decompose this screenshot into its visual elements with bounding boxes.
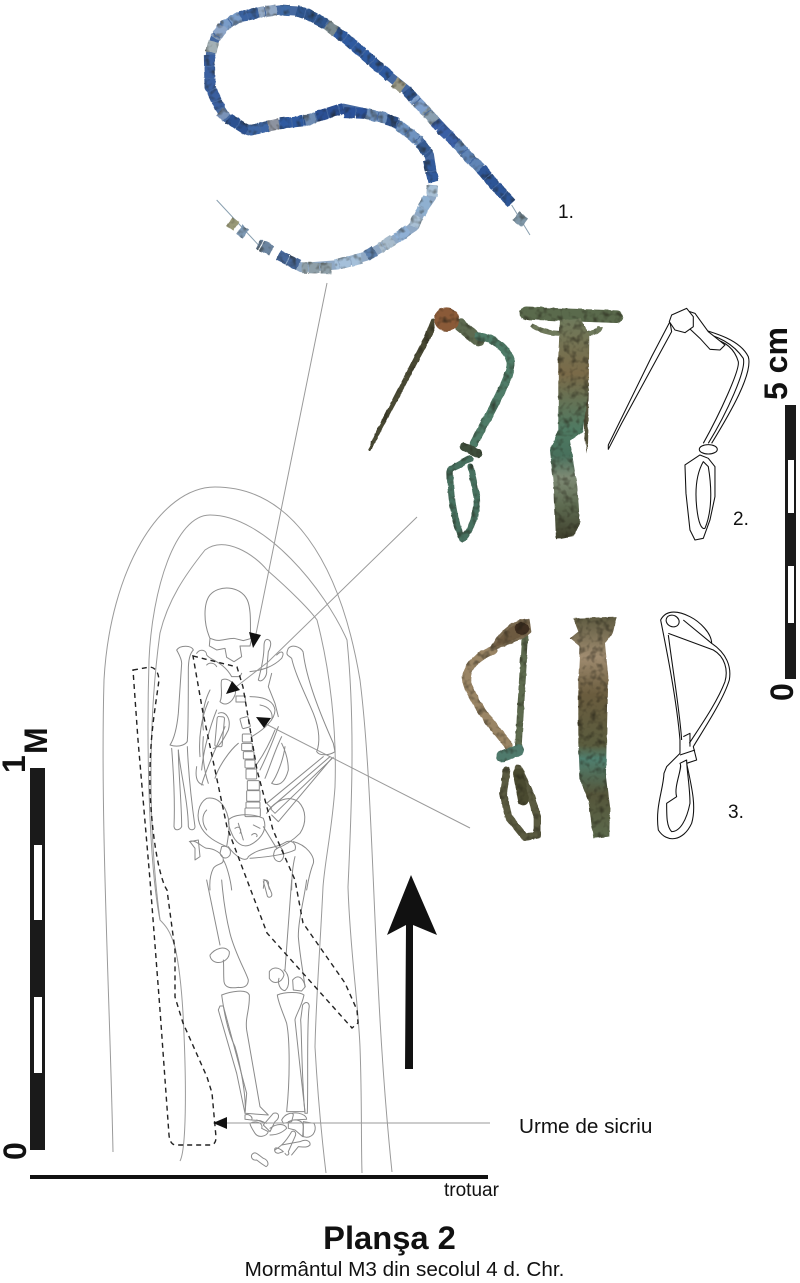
skeleton: upper body (170, 588, 335, 890)
shoulder girdle (197, 639, 283, 717)
arrowhead: to beads (249, 632, 261, 648)
front view photo (570, 617, 617, 838)
title: Planşa 2 (323, 1219, 456, 1256)
item number 1: 1. (558, 202, 574, 223)
arms (170, 646, 335, 830)
skull (205, 588, 251, 638)
ribs (196, 690, 288, 785)
label: coffin traces: Urme de sicriu (519, 1115, 652, 1138)
side view photo (369, 307, 511, 539)
scale bar: 5 cm: 5 cm (758, 327, 794, 400)
femur heads (189, 841, 314, 890)
fibula 2 line drawing (608, 308, 749, 540)
north arrow (387, 875, 437, 1069)
stray bone near left femur (263, 880, 272, 897)
fibula 3 line drawing (658, 612, 730, 839)
scale bar: 5 cm (758, 327, 800, 701)
jaw and teeth (209, 638, 252, 662)
fibula 3 photographs (466, 617, 617, 838)
ground line (30, 1175, 488, 1179)
leader lines with arrowheads (213, 283, 490, 1129)
arrowhead: coffin traces (213, 1117, 227, 1129)
item number 3: 3. (728, 802, 744, 823)
dashed coffin traces (133, 656, 358, 1145)
arrowhead: to fibula 2 (226, 681, 240, 694)
grave pit outlines (103, 487, 392, 1173)
scale bar: 1 metre: M (18, 727, 54, 754)
label: pavement: trotuar (444, 1180, 500, 1201)
side view photo (466, 620, 537, 837)
front view photo (526, 313, 617, 539)
necklace of blue beads (209, 10, 530, 268)
scale bar: 5 cm: 0 (764, 683, 800, 701)
skeleton: legs and feet (207, 880, 315, 1167)
fibula 2 photographs (369, 307, 617, 539)
arrowhead: to fibula 3 (256, 717, 271, 728)
sternum and spine (215, 696, 260, 817)
scale bar: 1 metre (0, 727, 54, 1160)
item number 2: 2. (733, 509, 749, 530)
foot bones (245, 1113, 315, 1167)
subtitle: Mormântul M3 din secolul 4 d. Chr. (245, 1258, 564, 1281)
pelvis (190, 798, 305, 889)
